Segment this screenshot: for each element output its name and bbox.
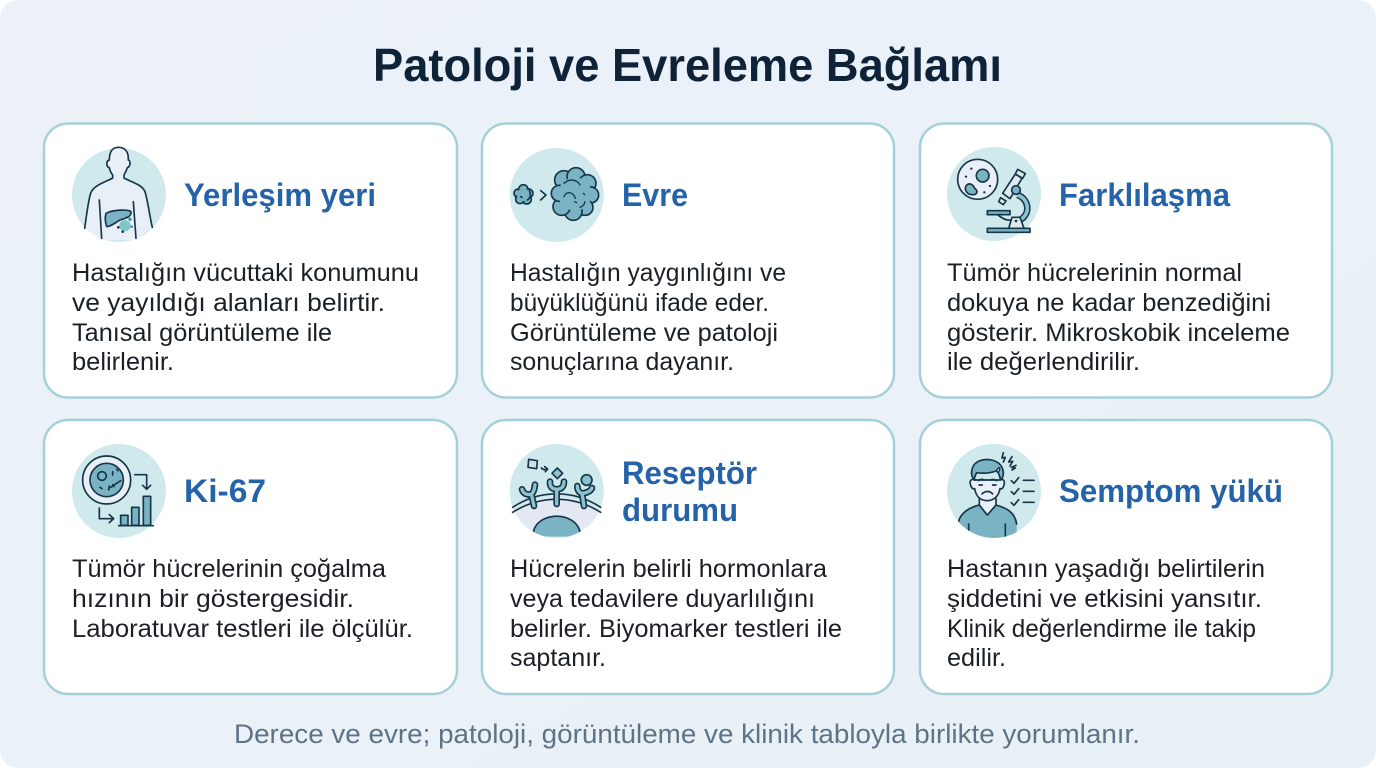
panel: Farklılaşma (920, 124, 1332, 398)
text block: Tümör hücrelerinin çoğalma (72, 555, 386, 583)
panel: Evre (482, 124, 894, 398)
text block: Tümör hücrelerinin normal (947, 259, 1242, 287)
heading: Ki-67 (184, 473, 266, 509)
icon: tumour growth (510, 148, 604, 242)
text block: Hücrelerin belirli hormonlara (510, 555, 827, 583)
heading: Farklılaşma (1059, 177, 1230, 213)
footer note: Derece ve evre; patoloji, görüntüleme ve klinik tabloyla birlikte yorumlanır. (234, 719, 1140, 749)
text block (947, 259, 1290, 376)
text block: Hastanın yaşadığı belirtilerin (947, 555, 1265, 583)
text block: büyüklüğünü ifade eder. (510, 289, 769, 317)
icon: body with liver (72, 147, 166, 242)
text block (510, 555, 842, 672)
text block: Tanısal görüntüleme ile (72, 319, 332, 347)
heading: Evre (622, 177, 688, 213)
heading: Reseptör (622, 455, 757, 491)
text block: Görüntüleme ve patoloji (510, 319, 778, 347)
icon: cell and microscope (947, 147, 1041, 241)
text block: belirler. Biyomarker testleri ile (510, 615, 842, 643)
title: Patoloji ve Evreleme Bağlamı (373, 39, 1002, 91)
heading: Yerleşim yeri (184, 177, 376, 213)
text block: saptanır. (510, 644, 606, 672)
text block: belirlenir. (72, 348, 174, 376)
heading: durumu (622, 492, 738, 528)
text block: Klinik değerlendirme ile takip (947, 615, 1256, 643)
panel: Yerleşim yeri (44, 124, 457, 398)
text block: edilir. (947, 644, 1006, 672)
text block: ile değerlendirilir. (947, 348, 1140, 376)
text block: gösterir. Mikroskobik inceleme (947, 319, 1290, 347)
icon: patient with symptom checklist (947, 444, 1041, 543)
text block (72, 259, 419, 376)
heading: Semptom yükü (1059, 473, 1283, 509)
text block: veya tedavilere duyarlılığını (510, 585, 815, 613)
panel: Reseptör durumu (482, 420, 894, 694)
text block: ve yayıldığı alanları belirtir. (72, 289, 385, 317)
heading (622, 455, 757, 528)
text block: Laboratuvar testleri ile ölçülür. (72, 615, 413, 643)
text block (947, 555, 1265, 672)
panel: Semptom yükü (920, 420, 1332, 694)
text block: sonuçlarına dayanır. (510, 348, 734, 376)
text block: hızının bir göstergesidir. (72, 585, 354, 613)
text block: Hastalığın vücuttaki konumunu (72, 259, 419, 287)
icon: cell proliferation chart (72, 444, 166, 538)
panel: Ki-67 (44, 420, 457, 694)
text block (72, 555, 413, 643)
text block (510, 259, 786, 376)
text block: Hastalığın yaygınlığını ve (510, 259, 786, 287)
text block: dokuya ne kadar benzediğini (947, 289, 1271, 317)
text block: şiddetini ve etkisini yansıtır. (947, 585, 1262, 613)
icon: cell receptors (510, 444, 604, 538)
